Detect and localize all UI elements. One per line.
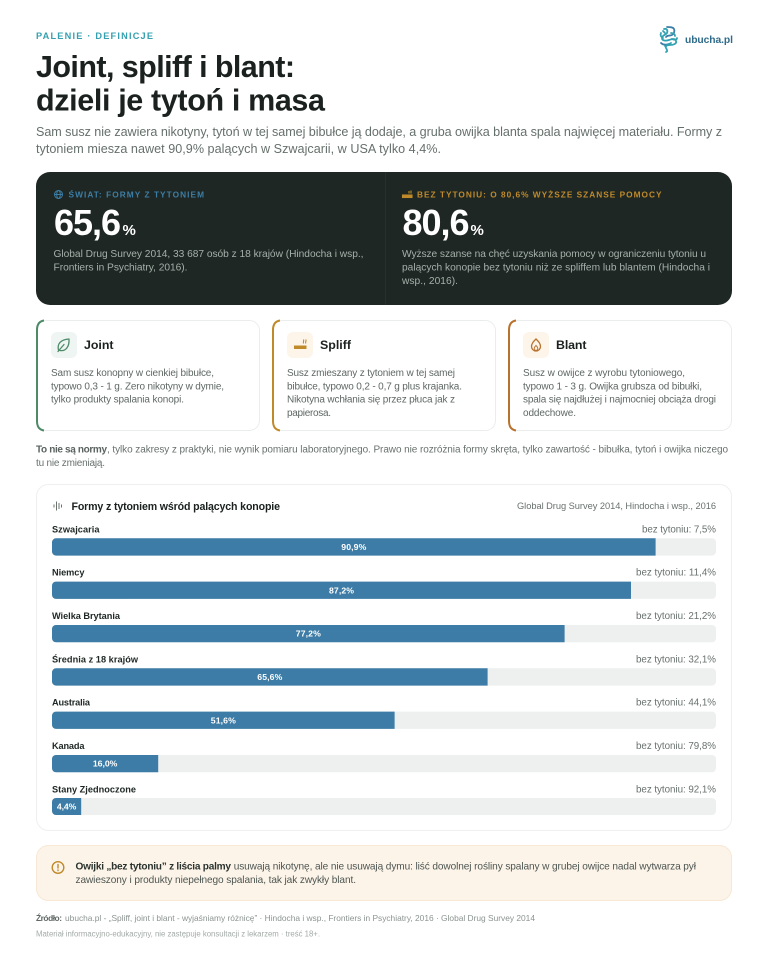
- note text: tu nie zmieniają.: [36, 458, 105, 469]
- disclaimer: Materiał informacyjno-edukacyjny, nie zastępuje konsultacji z lekarzem · treść 18+.: [36, 930, 320, 938]
- card: blant: [508, 320, 732, 430]
- header: [36, 27, 733, 156]
- card text: [51, 368, 224, 406]
- intro text: [36, 125, 722, 156]
- icon: ubucha logo mark: [661, 27, 677, 52]
- row: Stany Zjednoczone: Stany Zjednoczone: [52, 784, 136, 794]
- row: Wielka Brytania: [52, 611, 716, 642]
- note text: , tylko zakresy z praktyki, nie wynik pomiaru laboratoryjnego. Prawo nie rozróżnia formy skręta, tylko zawartość - bibułka, tytoń i owijka niczego: [107, 444, 728, 456]
- row: Srednia z 18 krajow: [52, 653, 716, 686]
- stat description: wsp., 2016).: [401, 276, 458, 287]
- card title: Blant: [556, 338, 586, 352]
- row: Srednia z 18 krajow: bez tytoniu: 32,1%: [636, 654, 716, 665]
- panel: bar chart: [36, 484, 732, 830]
- panel: definition cards: [36, 320, 732, 430]
- row: Australia: 51,6%: [211, 715, 236, 725]
- icon: warning: [52, 862, 64, 873]
- card title: Joint: [84, 338, 114, 352]
- logo: [661, 27, 733, 52]
- row: Australia: [52, 698, 716, 729]
- row: Szwajcaria: Szwajcaria: [52, 524, 100, 534]
- title: Joint, spliff i blant:: [36, 50, 295, 84]
- card text: typowo 0,3 - 1 g. Zero nikotyny w dymie,: [51, 382, 224, 392]
- row: Australia: bez tytoniu: 44,1%: [636, 698, 716, 709]
- stat: world: [54, 188, 364, 274]
- icon: cigarette: [287, 332, 313, 358]
- source line: ubucha.pl - „Spliff, joint i blant - wyjaśniamy różnicę” · Hindocha i wsp., Frontiers in Psychiatry, 2016 · Global Drug Survey 2014: [65, 913, 535, 923]
- row: Kanada: [52, 741, 716, 772]
- stat: without tobacco: [401, 190, 710, 287]
- row: Wielka Brytania: bez tytoniu: 21,2%: [636, 611, 716, 622]
- card text: tylko produkty spalania konopi.: [51, 394, 184, 406]
- title: [36, 50, 326, 118]
- callout text: zawieszony i produkty niepełnego spalania, tak jak zwykły blant.: [76, 875, 356, 886]
- eyebrow: PALENIE · DEFINICJE: [36, 31, 153, 41]
- row: Wielka Brytania: Wielka Brytania: [52, 611, 121, 621]
- stat description: Global Drug Survey 2014, 33 687 osób z 18 krajów (Hindocha i wsp.,: [54, 249, 364, 260]
- row: Stany Zjednoczone: [52, 784, 716, 815]
- card text: oddechowe.: [523, 408, 576, 419]
- row: Kanada: 16,0%: [93, 759, 118, 769]
- logo wordmark: ubucha.pl: [685, 35, 733, 46]
- icon: cigarette: [402, 190, 412, 198]
- card text: papierosa.: [287, 408, 331, 419]
- card text: Sam susz konopny w cienkiej bibułce,: [51, 368, 214, 379]
- stat description: Frontiers in Psychiatry, 2016).: [54, 262, 188, 274]
- stat description: palących konopie bez tytoniu niż ze spliffem lub blantem (Hindocha i: [402, 262, 710, 274]
- row: Niemcy: Niemcy: [52, 568, 85, 578]
- note text: To nie są normy: [36, 444, 107, 456]
- row: Kanada: bez tytoniu: 79,8%: [636, 741, 716, 752]
- row: Stany Zjednoczone: 4,4%: [57, 802, 77, 812]
- row: Niemcy: [52, 568, 716, 599]
- callout text: Owijki „bez tytoniu” z liścia palmy: [76, 862, 231, 872]
- row: Australia: Australia: [52, 698, 91, 708]
- callout text: usuwają nikotynę, ale nie usuwają dymu: liść dowolnej rośliny spalany w grubej owijce nadal wytwarza pył: [231, 862, 697, 872]
- card text: spala się najdłużej i najmocniej obciąża drogi: [523, 394, 716, 406]
- stat number: 80,6: [402, 202, 470, 243]
- icon: flame: [523, 332, 549, 358]
- callout text: [76, 862, 697, 886]
- card: spliff: [272, 320, 496, 430]
- row: Szwajcaria: [52, 524, 716, 556]
- card text: typowo 1 - 3 g. Owijka grubsza od bibułki,: [523, 382, 702, 392]
- row: Szwajcaria: bez tytoniu: 7,5%: [642, 524, 716, 535]
- row: Stany Zjednoczone: bez tytoniu: 92,1%: [636, 784, 716, 795]
- source line: Źródło:: [36, 912, 62, 923]
- icon: globe: [54, 190, 62, 198]
- card text: [287, 368, 462, 419]
- row: Srednia z 18 krajow: Średnia z 18 krajów: [52, 653, 139, 664]
- card: joint: [36, 320, 260, 430]
- card text: Susz w owijce z wyrobu tytoniowego,: [523, 368, 685, 379]
- title: dzieli je tytoń i masa: [36, 84, 326, 118]
- card text: Susz zmieszany z tytoniem w tej samej: [287, 368, 455, 379]
- row: Szwajcaria: 90,9%: [341, 542, 367, 552]
- row: Wielka Brytania: 77,2%: [296, 629, 321, 639]
- stat number: %: [122, 222, 136, 239]
- card title: Spliff: [320, 338, 352, 352]
- intro text: Sam susz nie zawiera nikotyny, tytoń w tej samej bibułce ją dodaje, a gruba owijka blanta spala najwięcej materiału. Formy z: [36, 125, 722, 139]
- callout: [36, 846, 732, 900]
- icon: leaf: [51, 332, 77, 358]
- row: Srednia z 18 krajow: 65,6%: [257, 672, 283, 682]
- stat description: [401, 249, 710, 287]
- icon: sound bars: [54, 502, 62, 510]
- card text: bibułce, typowo 0,2 - 0,7 g plus krajanka.: [287, 382, 462, 392]
- intro text: tytoniem miesza nawet 90,9% palących w Szwajcarii, w USA tylko 4,4%.: [36, 142, 441, 156]
- card text: Nikotyna wchłania się przez płuca jak z: [287, 394, 455, 406]
- stat label: BEZ TYTONIU: O 80,6% WYŻSZE SZANSE POMOCY: [417, 190, 662, 200]
- footer: [36, 912, 535, 938]
- stat number: 65,6: [54, 202, 121, 243]
- panel: hero statistics: [36, 172, 732, 305]
- chart title: Formy z tytoniem wśród palących konopie: [72, 501, 280, 513]
- chart source: Global Drug Survey 2014, Hindocha i wsp., 2016: [517, 501, 716, 511]
- row: Niemcy: 87,2%: [329, 585, 354, 595]
- row: Kanada: Kanada: [52, 741, 85, 751]
- stat description: Wyższe szanse na chęć uzyskania pomocy w ograniczeniu tytoniu u: [402, 249, 706, 260]
- stat description: [54, 249, 364, 274]
- stat number: %: [470, 222, 484, 239]
- stat label: ŚWIAT: FORMY Z TYTONIEM: [68, 188, 204, 200]
- row: Niemcy: bez tytoniu: 11,4%: [636, 568, 716, 579]
- note text: [36, 444, 728, 469]
- card text: [523, 368, 716, 419]
